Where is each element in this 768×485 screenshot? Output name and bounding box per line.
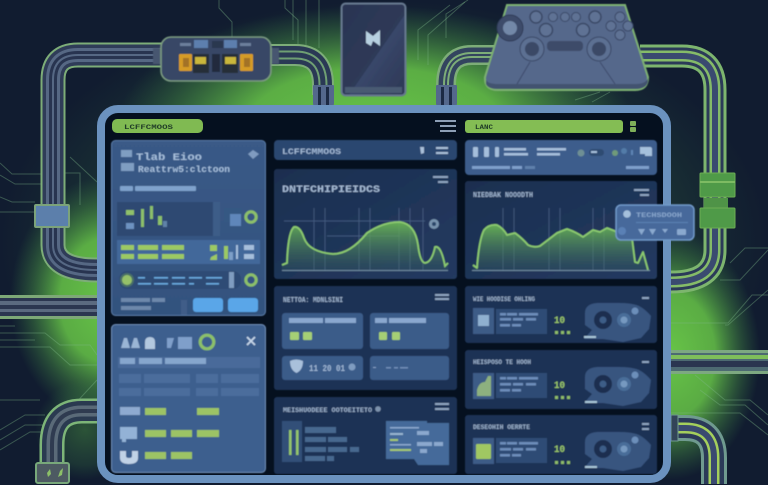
- cable: bottom right: [671, 428, 714, 484]
- cable: hub to tablet: [268, 55, 323, 95]
- sub-panel: status grid: [117, 240, 260, 264]
- table header: [118, 357, 260, 368]
- panel heading: [121, 150, 230, 175]
- card: [370, 313, 449, 349]
- sub-panel: signal bars: [117, 202, 256, 236]
- panel: network metrics: [274, 286, 457, 390]
- panel: middle header: LCFFCMMOOS: [282, 147, 341, 157]
- panel: right chart: [465, 181, 657, 279]
- cable: left horizontal: [0, 295, 98, 319]
- action row: [121, 298, 258, 315]
- line chart: [282, 222, 448, 271]
- cable: bottom left: [52, 411, 97, 470]
- cable: left loop: [53, 55, 170, 270]
- connector: gamepad to tablet: [436, 85, 457, 105]
- panel: neighbourhood: [274, 397, 457, 474]
- status rows: [120, 407, 219, 464]
- level bars: [282, 421, 302, 462]
- card: device row 1: WIE HOODISE OHLING: [473, 296, 535, 304]
- connector: hub to tablet: [313, 85, 334, 105]
- cable: gamepad to tablet: [446, 55, 495, 95]
- tablet device top: [342, 4, 406, 96]
- line chart: [472, 225, 650, 271]
- panel: middle chart: [274, 169, 457, 279]
- connector: right green clamp: [700, 173, 735, 228]
- grid: [503, 208, 604, 271]
- card: device row 3: 10: [554, 445, 565, 456]
- tablet frame: [101, 109, 667, 479]
- grid: [284, 208, 425, 271]
- icon: controller: [584, 303, 651, 342]
- card: device row 1: [465, 286, 657, 343]
- top bar left pill: LCFFCMOOS: [124, 124, 173, 131]
- panel: right chart: NIEDBAK NOOODTH: [473, 192, 533, 200]
- panel: left lower: [112, 324, 266, 472]
- card: device row 1: 10: [554, 316, 565, 327]
- icon row: [121, 335, 255, 349]
- hub device: [153, 37, 279, 81]
- card: device row 2: HEISPOSO TE HOOH: [473, 359, 531, 367]
- list: [305, 427, 359, 461]
- panel heading: Tlab Eioo: [136, 152, 202, 164]
- connector: left cable clamp: [35, 205, 69, 227]
- icon: controller: [584, 432, 651, 471]
- button: [228, 298, 258, 312]
- icon: gauge: [429, 219, 439, 229]
- callout: [616, 205, 694, 240]
- panel heading: Reattrw5:clctoon: [138, 165, 230, 175]
- top bar right pill: LANC: [475, 124, 493, 131]
- sub-panel: link row: [119, 271, 256, 289]
- icon: controller: [584, 367, 651, 406]
- floating card: [386, 421, 449, 465]
- button: [193, 298, 223, 312]
- icon: logo: [366, 30, 380, 46]
- card: value: [370, 356, 449, 380]
- top bar right pill: [465, 120, 636, 133]
- gamepad: [485, 5, 648, 90]
- callout: TECHSDOOH: [636, 212, 683, 219]
- panel: left upper: [112, 140, 266, 316]
- panel: middle chart: DNTFCHIPIEIDCS: [282, 185, 380, 196]
- panel: middle header: [274, 140, 457, 160]
- connector: bottom left plug: [36, 463, 69, 483]
- hamburger menu: [435, 120, 456, 132]
- card: device row 2: 10: [554, 381, 565, 392]
- panel: right header: [465, 140, 657, 175]
- cable: right horizontal: [670, 350, 768, 374]
- card: [282, 313, 363, 349]
- top bar left pill: [112, 119, 203, 133]
- table rows: [119, 374, 259, 396]
- panel: network metrics: NETTOA: MDNLSINI: [283, 297, 343, 305]
- cable: gamepad right loop: [640, 56, 715, 282]
- card: device row 3: [465, 415, 657, 474]
- joysticks and buttons: [497, 11, 633, 61]
- card: device row 2: [465, 350, 657, 409]
- progress bar: [120, 186, 196, 191]
- connector: bottom right socket: [671, 415, 678, 441]
- card: device row 3: DESEOHIH OERRTE: [473, 424, 530, 432]
- icon: status: [420, 147, 448, 154]
- icon: tag: [248, 150, 259, 159]
- card: counter: [282, 356, 363, 380]
- panel: neighbourhood: MEISHUODEEE OOTOEITETO: [283, 407, 372, 415]
- card: counter: 11 20 01: [309, 364, 345, 374]
